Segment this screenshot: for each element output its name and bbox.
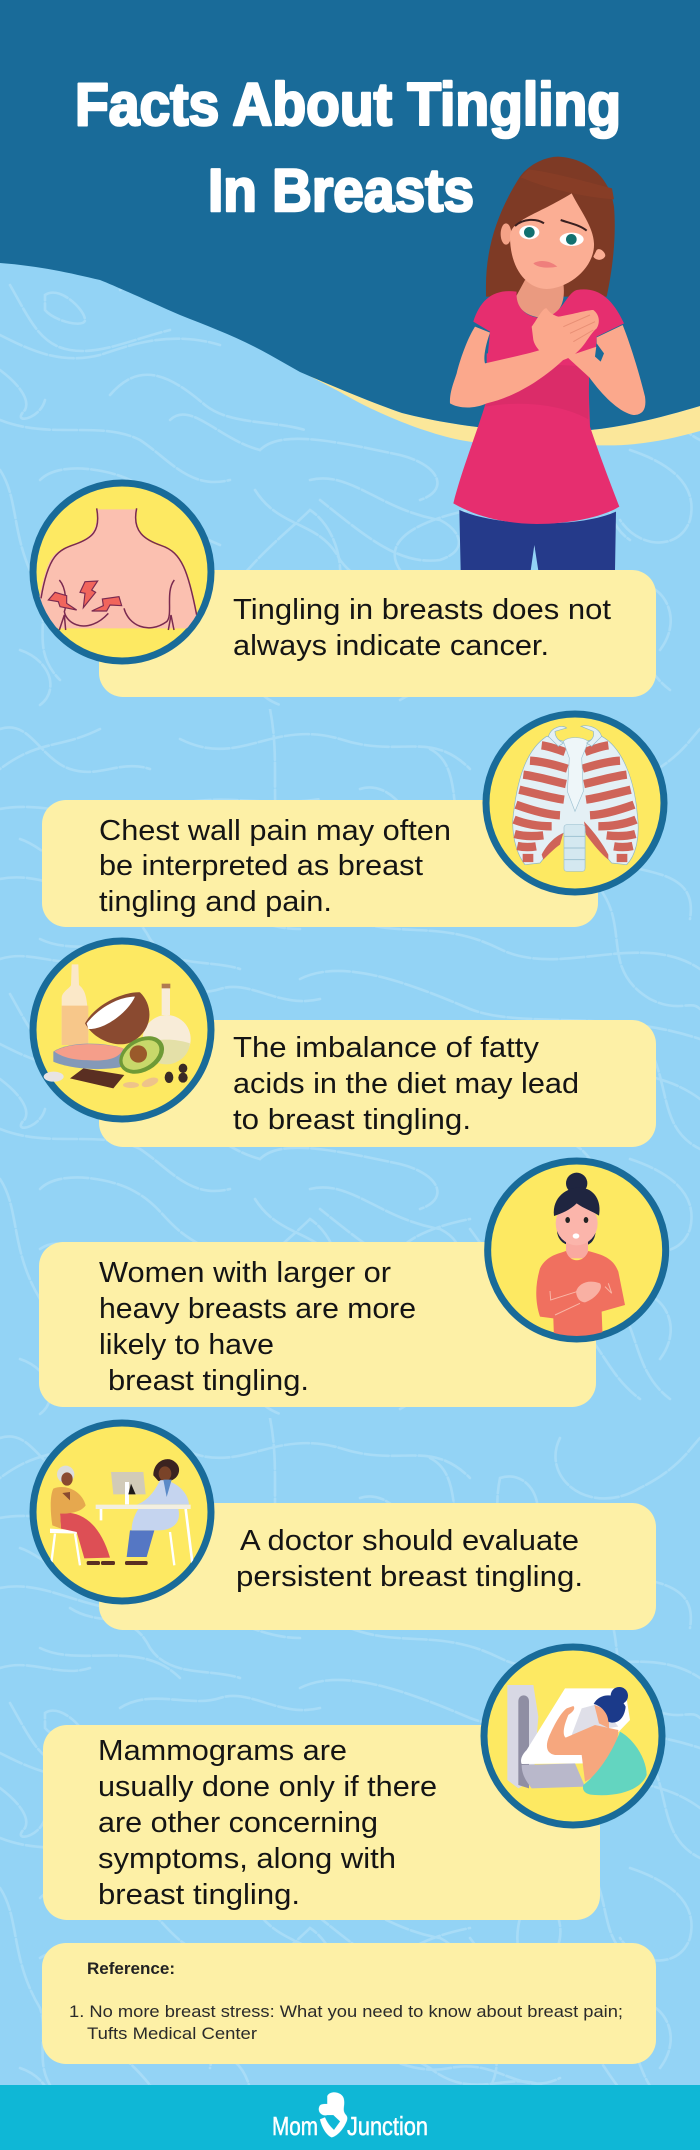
fact 2 text: be interpreted as breast	[99, 850, 423, 882]
reference heading: Reference:	[87, 1960, 175, 1978]
fact 3 text	[233, 1032, 579, 1136]
fact 6	[43, 1647, 662, 1920]
fact 1	[33, 483, 656, 697]
icon: healthy fats foods	[33, 941, 211, 1119]
reference list: 1. No more breast stress: What you need to know about breast pain;	[69, 2002, 623, 2021]
fact 6 text: symptoms, along with	[98, 1843, 396, 1875]
fact 5	[33, 1423, 656, 1630]
fact 3 text: to breast tingling.	[233, 1104, 471, 1136]
fact 6 text: breast tingling.	[98, 1879, 300, 1911]
fact 4 text: likely to have	[99, 1329, 274, 1361]
fact 6 text: Mammograms are	[98, 1735, 347, 1767]
title: In Breasts	[208, 157, 474, 224]
icon: chest with pain bolts	[33, 483, 211, 661]
fact 3	[33, 941, 656, 1147]
reference panel	[42, 1943, 656, 2064]
fact 5 text: persistent breast tingling.	[236, 1561, 583, 1593]
card 1	[99, 570, 656, 697]
fact 3 text: The imbalance of fatty	[233, 1032, 540, 1064]
card 4	[39, 1242, 596, 1407]
fact 2	[42, 714, 664, 927]
card 6	[43, 1725, 600, 1920]
icon: mammogram machine	[484, 1647, 662, 1825]
fact 4	[39, 1161, 666, 1407]
fact 2 text: Chest wall pain may often	[99, 815, 451, 847]
icon: doctor consultation	[33, 1423, 211, 1601]
title: Facts About Tingling	[75, 71, 621, 138]
card 3	[99, 1020, 656, 1147]
logo: MomJunction: Mom	[272, 2111, 318, 2141]
fact 6 text: are other concerning	[98, 1807, 378, 1839]
fact 6 text	[98, 1735, 437, 1911]
header wave band	[0, 0, 700, 445]
reference list	[69, 2002, 623, 2043]
fact 1 text: Tingling in breasts does not	[233, 594, 611, 626]
title	[75, 71, 621, 224]
fact 4 text	[99, 1257, 416, 1397]
fact 1 text: always indicate cancer.	[233, 630, 549, 662]
fact 5 text	[236, 1525, 583, 1593]
fact 1 text	[233, 594, 611, 662]
card 2	[42, 800, 598, 927]
fact 2 text	[99, 815, 451, 918]
fact 6 text: usually done only if there	[98, 1771, 437, 1803]
card 5	[99, 1503, 656, 1630]
icon: woman with hand on chest	[488, 1161, 666, 1339]
fact 3 text: acids in the diet may lead	[233, 1068, 579, 1100]
fact 4 text: Women with larger or	[99, 1257, 391, 1289]
fact 2 text: tingling and pain.	[99, 886, 332, 918]
logo: MomJunction: Junction	[347, 2111, 428, 2141]
fact 4 text: breast tingling.	[108, 1365, 309, 1397]
fact 4 text: heavy breasts are more	[99, 1293, 416, 1325]
fact 5 text: A doctor should evaluate	[240, 1525, 579, 1557]
logo: MomJunction	[272, 2092, 428, 2141]
footer	[0, 2085, 700, 2150]
reference list: Tufts Medical Center	[87, 2024, 257, 2043]
icon: rib cage	[486, 714, 664, 892]
illustration: worried woman holding chest	[450, 157, 645, 571]
